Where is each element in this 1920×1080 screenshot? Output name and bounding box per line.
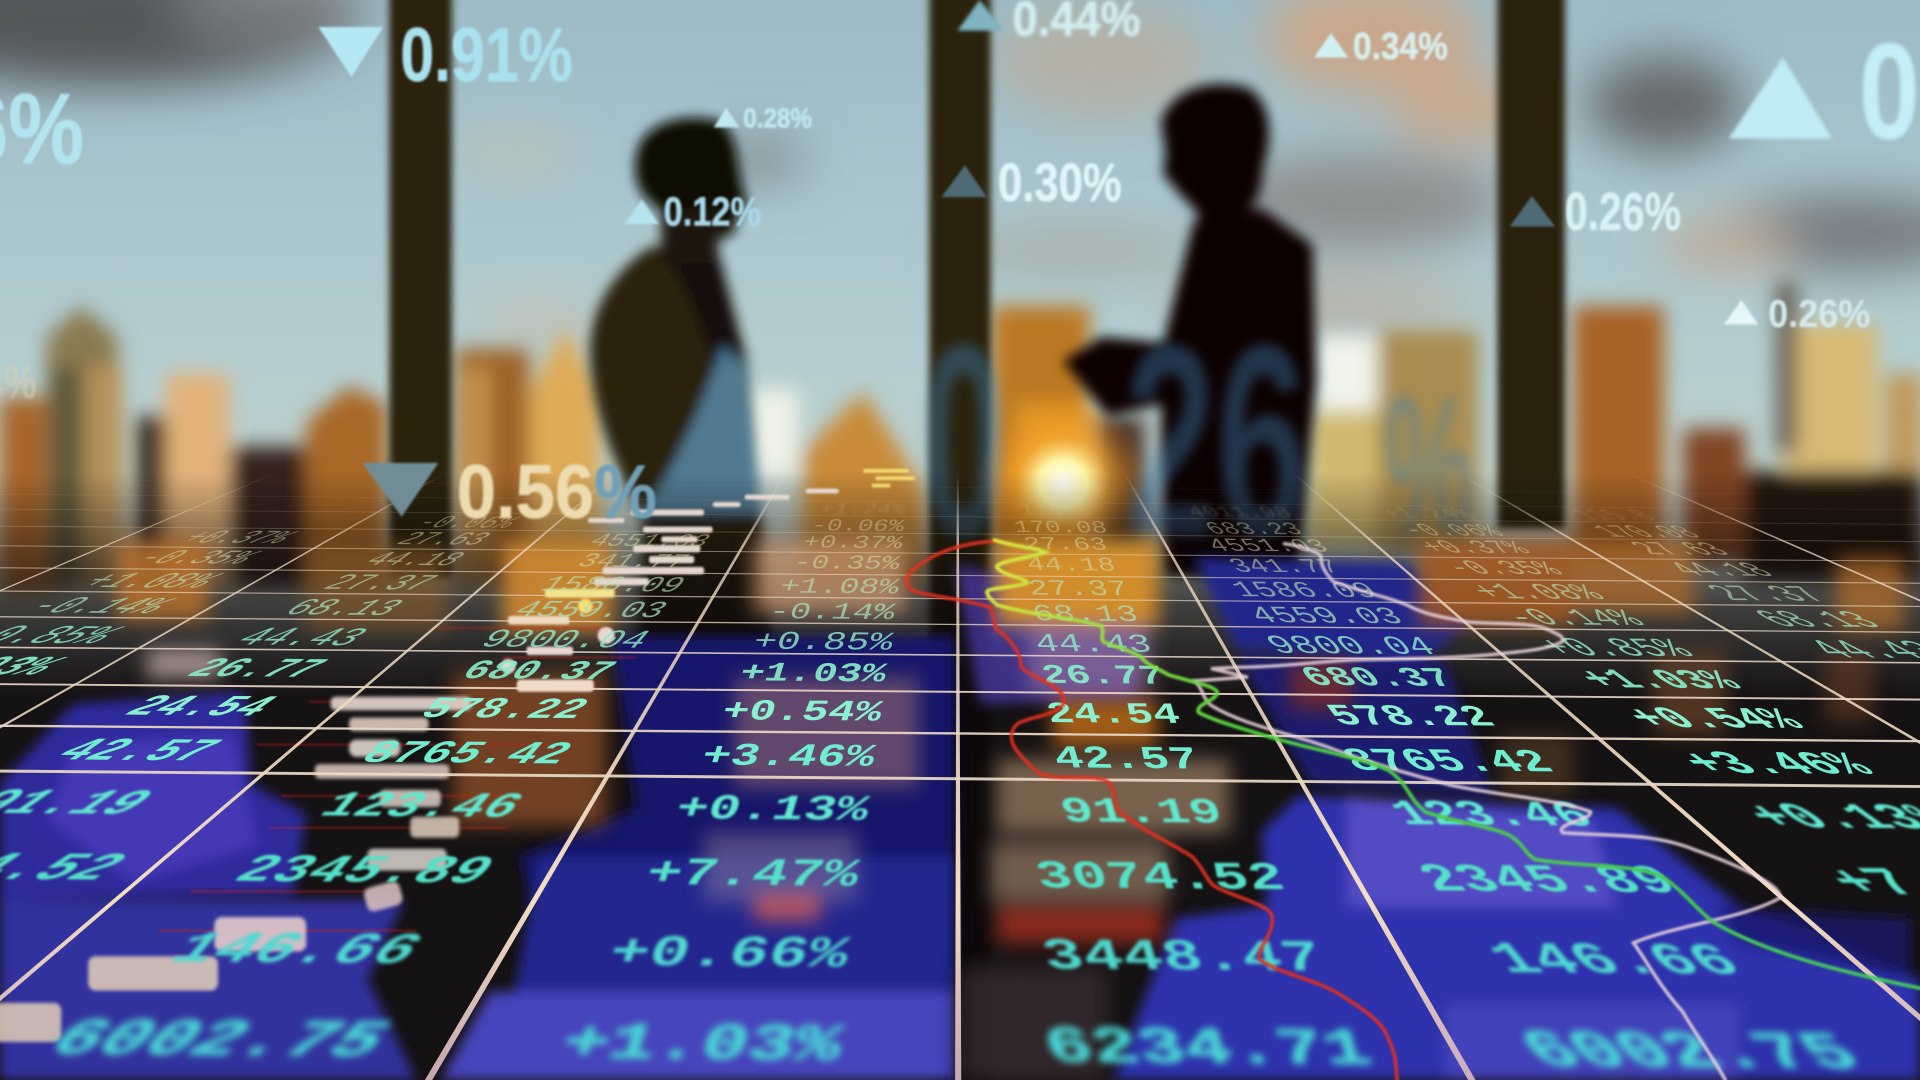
row 6: 26.77 (172, 655, 337, 685)
clouds (0, 0, 1920, 333)
row 8: 68.13 (271, 596, 413, 622)
row 8: -0.14% (8, 593, 187, 620)
line chart: red series (907, 541, 1397, 1080)
row 7: 9800.04 (471, 625, 658, 655)
row 10: 341.77 (1223, 556, 1348, 579)
indicator: up 0.26% far right: 0.26% (1768, 292, 1870, 335)
row 11: 4551.03 (583, 530, 717, 552)
big translucent figure: 0.26%: 26 (1124, 288, 1308, 596)
blurred foreground candles (0, 697, 471, 1042)
row 9: 27.37 (1694, 581, 1843, 608)
row 12: 170.08 (1583, 522, 1714, 543)
city skyline (0, 282, 1920, 594)
row 11: 27.63 (1621, 539, 1744, 561)
row 9: 1586.09 (1226, 578, 1385, 604)
indicator: up 0.44% (958, 0, 1140, 46)
row 4: 42.57 (39, 733, 234, 770)
row 10: 44.18 (1024, 554, 1119, 577)
row 6: 26.77 (1038, 661, 1168, 692)
row 5: 24.54 (109, 691, 289, 725)
silhouette: left businessman (590, 118, 784, 759)
row 8: -0.14% (765, 599, 899, 627)
row 12: -0.06% (808, 516, 908, 536)
row 0 (31, 1010, 1879, 1080)
row 5: +0.54% (1613, 702, 1819, 737)
row 10: 341.77 (570, 551, 695, 573)
row 2: 2345.89 (1407, 857, 1691, 904)
grid horizontals (0, 479, 1920, 996)
indicator: up 0.30% (942, 154, 1122, 213)
row 9: +1.08% (1461, 579, 1616, 606)
row 1: 146.66 (155, 924, 437, 976)
window pillars (389, 0, 1565, 1080)
big translucent figure: 0.26%: % (1384, 353, 1473, 579)
row 9: +1.08% (64, 569, 234, 594)
candlestick bars (501, 469, 915, 692)
indicator: up 0.26% centre right: 0.26% (1565, 183, 1681, 243)
row 4: 42.57 (1050, 742, 1203, 779)
row 1: 146.66 (1475, 935, 1756, 987)
row 10: -0.35% (1436, 557, 1574, 580)
row 9: 27.37 (1025, 576, 1131, 602)
row 6: +1.03% (736, 659, 890, 690)
row 13: +1.24% (1372, 504, 1485, 523)
row 0: 6234.71 (1038, 1018, 1378, 1079)
red hairlines beside price cells (159, 628, 637, 931)
row 4: +3.46% (697, 739, 880, 776)
row 7: +0.85% (749, 627, 897, 657)
row 8: 4559.03 (1243, 603, 1411, 630)
indicator: down 0.91% (318, 12, 573, 97)
row 8: 68.13 (1742, 607, 1898, 634)
indicator: up 0.26% centre right (1510, 183, 1681, 243)
row 4: +3.46% (1667, 746, 1891, 784)
row 11 (166, 527, 1744, 561)
row 5: 578.22 (410, 694, 597, 727)
row 1 (155, 924, 1756, 988)
row 13 (817, 500, 1669, 525)
row 11: 27.63 (1021, 534, 1110, 556)
row 11: +0.37% (800, 533, 906, 554)
row 5: 578.22 (1319, 701, 1505, 735)
row 11: +0.37% (1411, 537, 1539, 559)
row 4 (39, 733, 1891, 784)
row 2: +7.47% (640, 852, 865, 898)
row 11: +0.37% (166, 528, 306, 549)
row 1: 3448.47 (1037, 932, 1329, 984)
indicator: up 0.28%: 0.28% (743, 102, 812, 134)
market data table (0, 492, 1920, 1080)
row 12: 683.23 (1200, 520, 1309, 540)
big translucent figure: 0.26% (921, 288, 1473, 596)
row 9: 1586.09 (532, 573, 692, 599)
silhouette: right businessman (1063, 84, 1316, 576)
row 9: 27.37 (312, 570, 447, 596)
row 4: 8765.42 (1334, 744, 1564, 781)
row 13: 115.8 (1018, 502, 1095, 521)
indicator: large up arrow at right (1729, 16, 1920, 168)
row 8: -0.14% (1494, 605, 1657, 633)
row 7: 9800.04 (1258, 631, 1445, 662)
row 8 (8, 593, 1899, 635)
row 3: 123.46 (308, 786, 534, 828)
row 11: 27.63 (387, 529, 500, 550)
row 10: -0.35% (120, 547, 270, 570)
grid verticals (0, 476, 1920, 1080)
row 3: +0.13% (670, 789, 875, 830)
row 13: +1.24% (817, 501, 909, 519)
row 8: 68.13 (1029, 602, 1142, 629)
line chart: white series (1195, 544, 1780, 1080)
indicator: down 0.56% (362, 450, 657, 535)
row 5 (109, 690, 1820, 737)
row 3: 123.46 (1380, 795, 1606, 837)
row 2: 2345.89 (221, 848, 507, 895)
row 3 (0, 783, 1920, 840)
row 7 (0, 620, 1920, 666)
row 7: 44.43 (1031, 629, 1155, 660)
indicator: up 0.26% far right (1724, 292, 1870, 335)
indicator: up 0.12%: 0.12% (664, 189, 761, 234)
row 8: 4559.03 (506, 597, 675, 624)
row 13: 4011.98 (1182, 503, 1298, 522)
row 7: +0.85% (1526, 633, 1707, 664)
line chart: green series (987, 540, 1920, 988)
row 2: 3074.52 (1031, 855, 1290, 902)
indicator: down 0.56%: 0.56% (457, 450, 657, 535)
row 7: 44.43 (222, 623, 380, 653)
row 12: -0.06% (405, 514, 526, 533)
row 6: 680.37 (1293, 663, 1464, 695)
row 6: +1.03% (1567, 665, 1756, 697)
row 12 (405, 513, 1714, 543)
row 11: 4551.03 (1202, 535, 1335, 557)
indicator: up 0.30%: 0.30% (998, 154, 1122, 213)
row 4: 8765.42 (350, 736, 581, 773)
row 9 (64, 568, 1844, 608)
row 2 (0, 845, 1920, 908)
row 5: 24.54 (1043, 698, 1184, 732)
row 12: 170.08 (1012, 518, 1110, 538)
row 0: 6002.75 (31, 1011, 405, 1071)
row 9: +1.08% (776, 574, 904, 600)
indicator: down 0.91%: 0.91% (400, 12, 573, 97)
indicator: up 0.34%: 0.34% (1353, 25, 1448, 67)
row 13: 115.8 (1562, 506, 1669, 525)
row 1: +0.66% (602, 929, 856, 980)
row 6 (0, 651, 1756, 697)
sun glare (977, 398, 1149, 569)
indicator: large up arrow at right: 0 (1859, 16, 1920, 168)
reflections through the floor (116, 540, 1904, 1080)
big translucent figure: 0.26%: 0 (921, 288, 1007, 596)
row 10: 44.18 (1657, 559, 1789, 582)
row 10: 44.18 (354, 549, 474, 571)
floor darkening (0, 471, 1920, 1080)
world map panels (0, 557, 1920, 1080)
row 3: 91.19 (1056, 792, 1227, 833)
row 5: +0.54% (718, 695, 887, 730)
row 6: 680.37 (452, 656, 623, 688)
row 10 (120, 546, 1790, 582)
row 10: -0.35% (790, 552, 904, 575)
perspective grid (0, 476, 1920, 1080)
row 12: -0.06% (1393, 521, 1513, 541)
row 0: +1.03% (554, 1015, 850, 1075)
